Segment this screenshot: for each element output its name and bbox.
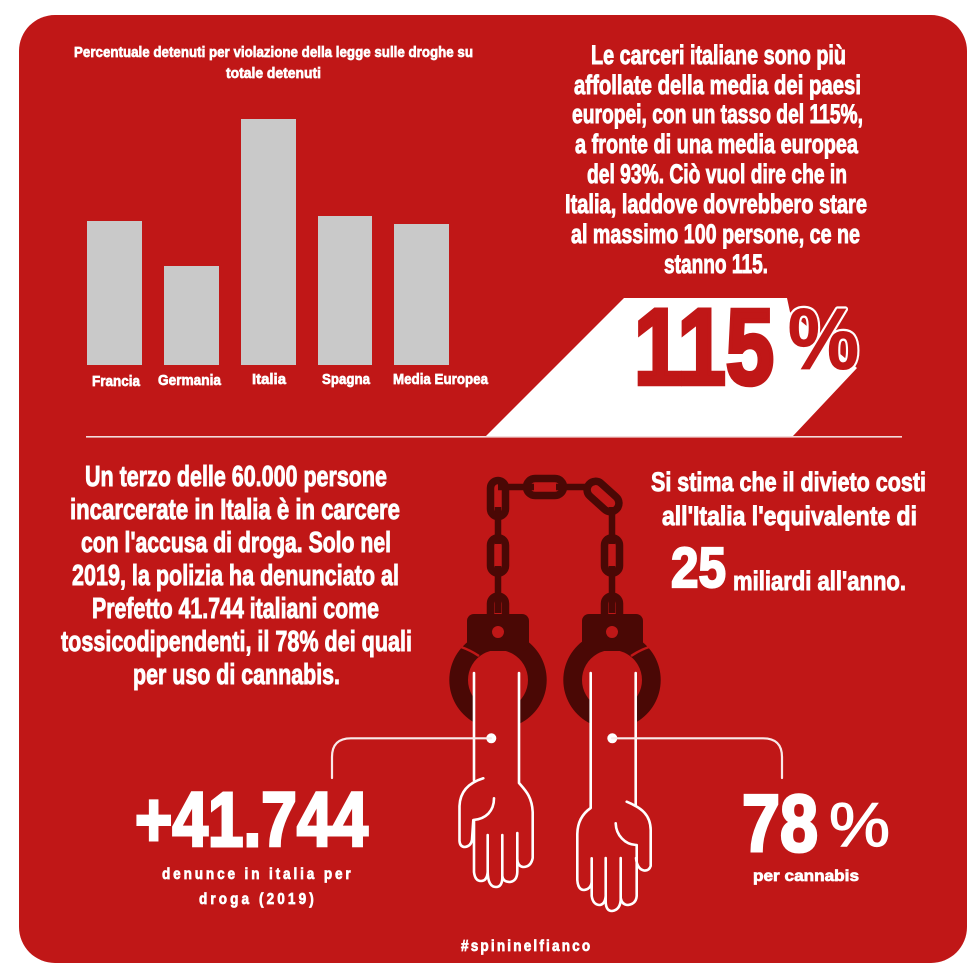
text block: cost: 25: [671, 536, 726, 600]
bar: Germania: Germania: [158, 372, 222, 389]
stat: +41.744: denunce in italia per: [162, 866, 351, 883]
stat: 78%: [742, 779, 890, 885]
chart title: totale detenuti: [226, 66, 321, 82]
long shadow: [486, 298, 857, 436]
left arm and hand: [460, 673, 533, 887]
text block: one third: con l'accusa di droga. Solo nel: [81, 527, 391, 559]
text block: one third: Un terzo delle 60.000 persone: [85, 461, 387, 493]
bar: Spagna: Spagna: [322, 371, 371, 388]
connector: right callout line: [607, 733, 782, 778]
text block: one third: Prefetto 41.744 italiani come: [92, 593, 379, 625]
stat: +41.744: [135, 777, 368, 908]
text block: one third: [61, 461, 412, 691]
text block: cost: all'Italia l'equivalente di: [662, 501, 917, 531]
illustration: handcuffs and chain: [449, 478, 661, 911]
text block: cost: [651, 467, 926, 600]
text block: overcrowding: stanno 115.: [664, 249, 768, 279]
stat: +41.744: +41.744: [135, 777, 368, 863]
connector: left callout line: [332, 733, 496, 778]
divider: [86, 436, 902, 438]
text block: overcrowding: [565, 40, 867, 279]
text block: overcrowding: a fronte di una media europea: [575, 129, 859, 159]
hashtag: #spininelfianco: [461, 938, 590, 955]
bar: Francia: [87, 221, 142, 390]
text block: cost: miliardi all'anno.: [733, 566, 906, 596]
bar: Italia: Italia: [252, 371, 287, 388]
text block: one third: incarcerate in Italia è in carcere: [70, 494, 400, 526]
chain: [490, 478, 622, 616]
chart title: [74, 45, 473, 82]
stat: 78%: per cannabis: [753, 868, 859, 885]
bar: Germania: [158, 266, 222, 389]
stat: 78%: 78: [742, 779, 818, 869]
right arm and hand: [577, 673, 651, 911]
bar: Media Europea: [393, 224, 489, 388]
bar: Italia: [241, 119, 296, 388]
left cuff: [449, 614, 547, 740]
number 115: 115: [634, 286, 774, 407]
text block: overcrowding: al massimo 100 persone, ce ne: [571, 219, 860, 249]
percent sign: %: [788, 292, 859, 388]
bar: Francia: Francia: [92, 373, 141, 390]
text block: overcrowding: affollate della media dei paesi: [574, 70, 861, 100]
text block: one third: tossicodipendenti, il 78% dei quali: [61, 626, 412, 658]
chart title: Percentuale detenuti per violazione della legge sulle droghe su: [74, 45, 473, 61]
text block: one third: 2019, la polizia ha denunciato al: [72, 560, 399, 592]
right cuff: [563, 614, 661, 740]
big stat: 115% with long shadow: [486, 286, 859, 436]
text block: overcrowding: europei, con un tasso del 115%,: [572, 99, 863, 129]
text block: one third: per uso di cannabis.: [133, 659, 340, 691]
stat: +41.744: droga (2019): [199, 891, 314, 908]
stat: 78%: %: [829, 791, 890, 860]
text block: overcrowding: Le carceri italiane sono più: [591, 40, 846, 70]
bar chart: [87, 119, 489, 390]
text block: overcrowding: del 93%. Ciò vuol dire che in: [587, 159, 847, 189]
bar: Spagna: [318, 216, 372, 388]
percent sign: %: [788, 292, 859, 388]
bar: Media Europea: Media Europea: [393, 371, 489, 388]
text block: overcrowding: Italia, laddove dovrebbero stare: [565, 189, 867, 219]
